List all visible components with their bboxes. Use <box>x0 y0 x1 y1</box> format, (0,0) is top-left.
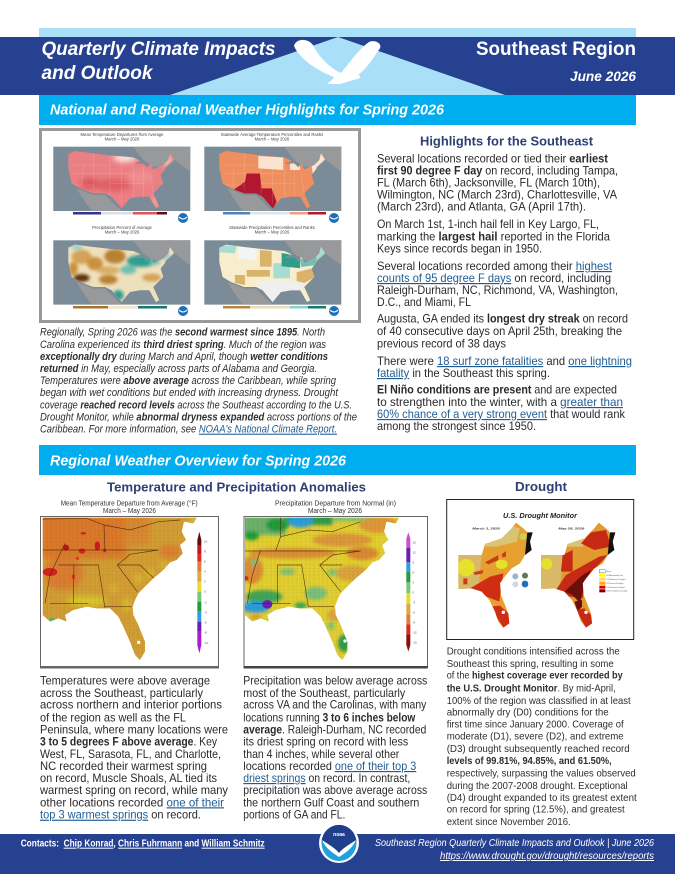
text block: regional summary: Drought Monitor, while abnormal dryness expanded across portions of the <box>40 411 357 423</box>
text block: regional summary: Carolina experienced its third driest spring. Much of the region was <box>40 339 327 351</box>
text block: highlights: There were 18 surf zone fatalities and one lightning <box>377 355 632 368</box>
map: precipitation anomaly shading <box>245 518 399 660</box>
text block: highlights: Several locations recorded among their highest <box>377 260 613 273</box>
text block: precipitation summary: driest springs on record. In contrast, <box>243 772 410 785</box>
panel: four national climate maps: March – May 2026 <box>255 230 290 234</box>
caption: March – May 2026 <box>103 508 156 515</box>
text: map title: Statewide Precipitation Percentiles and Ranks <box>229 225 315 230</box>
legend: precipitation scale: 12 <box>412 550 416 554</box>
text block: drought summary: levels of 99.81%, 94.85%, and 61.50%, <box>447 756 612 767</box>
title: and Outlook <box>42 63 154 84</box>
text block: highlights <box>377 153 632 433</box>
text block: regional summary: exceptionally dry during March and April, though wetter conditions <box>40 351 328 363</box>
text block: drought summary: 100% of the region was classified in at least <box>447 696 631 707</box>
text block: temperature summary: of the region as well as the FL <box>40 711 187 724</box>
region name: Southeast Region <box>476 39 636 60</box>
legend: temperature scale: 2 <box>204 579 206 583</box>
text block: drought summary: of the highest coverage ever recorded by <box>447 671 623 682</box>
title: Quarterly Climate Impacts <box>42 39 276 60</box>
text block: highlights: 60% chance of a very strong event that would rank <box>377 408 625 421</box>
text block: highlights: among the strongest since 1950. <box>377 420 536 433</box>
legend: precipitation scale <box>406 532 417 652</box>
icon: noaa logo: noaa <box>333 832 345 838</box>
legend: drought categories: D0 Abnormally Dry <box>606 574 623 577</box>
legend: precipitation scale: -6 <box>412 610 415 614</box>
map: march drought: March 3, 2026 <box>472 526 500 530</box>
text block: highlights: marking the largest hail reported in the Florida <box>377 230 611 243</box>
text block: precipitation summary: most of the Southeast, particularly <box>243 687 405 700</box>
section banner: national and regional highlights: National and Regional Weather Highlights for Spring 2026 <box>50 102 445 118</box>
chart: precipitation departure map <box>242 501 428 668</box>
text block: highlights: Several locations recorded or tied their earliest <box>377 153 608 166</box>
contacts: Contacts: Chip Konrad, Chris Fuhrmann and William Schmitz <box>21 839 265 850</box>
map: march drought <box>457 523 537 628</box>
legend: temperature bar <box>73 212 167 214</box>
text block: highlights: El Niño conditions are present and are expected <box>377 384 617 397</box>
text block: highlights: counts of 95 degree F days on record, including <box>377 272 611 285</box>
caption <box>61 500 198 515</box>
section banner: national and regional highlights <box>39 95 636 125</box>
text block: highlights: of 40 consecutive days on April 25th, breaking the <box>377 325 622 338</box>
text block: highlights: FL (March 6th), Jacksonville, FL (March 10th), <box>377 177 600 190</box>
text block: highlights: Wilmington, NC (March 23rd), Charlottesville, VA <box>377 189 617 202</box>
text block: drought summary: during the 2007-2008 drought. Exceptional <box>447 781 628 792</box>
heading: temperature and precipitation anomalies: Temperature and Precipitation Anomalies <box>107 480 366 494</box>
legend: temperature scale: -6 <box>204 620 207 624</box>
legend: precipitation scale: 0 <box>412 590 414 594</box>
icon: noaa seal <box>329 213 339 223</box>
text block: precipitation summary: locations running 3 to 6 inches below <box>243 711 416 724</box>
report date: June 2026 <box>570 68 636 84</box>
text block: temperature summary <box>39 675 228 822</box>
map: mean temperature departures <box>53 147 190 211</box>
text block: precipitation summary: locations recorded one of their top 3 <box>243 760 416 773</box>
legend: temperature scale: 8 <box>204 549 206 553</box>
text block: highlights: first 90 degree F day on record, including Tampa, <box>377 165 618 178</box>
section banner: regional weather overview: Regional Weather Overview for Spring 2026 <box>50 454 347 470</box>
text block: precipitation summary: portions of GA and FL. <box>243 809 345 822</box>
map: may drought <box>541 523 619 628</box>
legend: temperature scale: -2 <box>204 600 207 604</box>
text block: regional summary: returned in May, especially across parts of Alabama and Georgia. <box>40 363 317 375</box>
text block: precipitation summary: average. Raleigh-Durham, NC recorded <box>243 724 426 737</box>
text block: regional summary <box>40 327 357 436</box>
text block: temperature summary: Temperatures were above average <box>40 675 210 688</box>
caption: Mean Temperature Departure from Average (°F) <box>61 500 198 508</box>
map: precipitation percent of average <box>53 240 190 305</box>
icon: noaa seal <box>329 306 339 316</box>
text block: temperature summary: NC recorded their warmest spring <box>40 760 207 773</box>
legend: rank bar <box>223 306 326 308</box>
text block: temperature summary: Peninsula, where many locations were <box>40 724 228 737</box>
text block: drought summary: Drought conditions intensified across the <box>447 647 620 658</box>
legend: drought categories: D1 Moderate Drought <box>606 578 626 581</box>
map: statewide precipitation ranks <box>204 240 341 305</box>
text block: regional summary: Regionally, Spring 2026 was the second warmest since 1895. North <box>40 327 325 339</box>
text block: drought summary <box>447 647 637 828</box>
legend: precipitation scale: 9 <box>412 560 414 564</box>
text block: temperature summary: 3 to 5 degrees F above average. Key <box>40 736 217 749</box>
legend: drought categories: D2 Severe Drought <box>606 582 624 585</box>
panel: four national climate maps <box>40 130 360 322</box>
legend: precipitation scale: -12 <box>412 630 417 634</box>
legend: precipitation scale: -9 <box>412 620 415 624</box>
map title: U.S. Drought Monitor <box>503 513 578 520</box>
text: map title: Statewide Average Temperature Percentiles and Ranks <box>221 132 323 137</box>
legend: drought categories <box>599 570 628 593</box>
text block: drought summary: on record for spring (12.5%), and greatest <box>447 805 625 816</box>
text: map title: Precipitation Percent of Average <box>92 225 153 230</box>
map: statewide temperature ranks <box>204 147 341 211</box>
header triangle <box>170 37 505 95</box>
text block: temperature summary: top 3 warmest springs on record. <box>40 809 201 822</box>
text block: drought summary: respectively, surpassing the values observed <box>447 769 636 780</box>
text block: highlights: (March 23rd), and Atlanta, GA (April 17th). <box>377 201 586 214</box>
legend: drought categories: D4 Exceptional Drought <box>606 590 628 593</box>
text block: highlights: On March 1st, 1-inch hail fell in Key Largo, FL, <box>377 218 599 231</box>
icon: white bird <box>294 40 380 84</box>
panel: four national climate maps: March – May 2026 <box>255 136 290 142</box>
text block: highlights: to strengthen into the winter, with a greater than <box>377 396 623 409</box>
legend: precipitation scale: 6 <box>412 570 414 574</box>
caption: Precipitation Departure from Normal (in) <box>275 501 396 508</box>
text block: drought summary: the U.S. Drought Monitor. By mid-April, <box>447 683 616 694</box>
text block: highlights: previous record of 38 days <box>377 337 506 350</box>
text block: highlights: Keys since records began in 1950. <box>377 243 542 256</box>
chart: mean temperature departure map <box>40 500 219 668</box>
text block: regional summary: Caribbean. For more information, see NOAA's National Climate Report. <box>40 424 337 436</box>
map: temperature anomaly shading <box>42 518 196 660</box>
legend: rank bar <box>223 212 326 214</box>
legend: temperature scale: -10 <box>204 641 209 645</box>
title <box>42 39 276 84</box>
text block: highlights: Raleigh-Durham, NC, Richmond, VA, Washington, <box>377 284 618 297</box>
legend: temperature scale: -4 <box>204 610 207 614</box>
text block: precipitation summary: across VA and the Carolinas, with many <box>243 699 426 712</box>
map: may drought: May 26, 2026 <box>558 526 585 530</box>
legend: precipitation scale: 3 <box>412 580 414 584</box>
chart: us drought monitor maps <box>447 500 634 640</box>
text block: highlights: fatality in the Southeast this spring. <box>377 367 550 380</box>
text block: drought summary: (D3) drought subsequently reached record <box>447 744 630 755</box>
icons: partner logos <box>512 573 528 587</box>
legend: drought categories: None <box>606 571 612 573</box>
header banner <box>0 28 675 95</box>
legend: temperature scale: 0 <box>204 589 206 593</box>
caption: March – May 2026 <box>308 508 362 515</box>
icon: noaa seal <box>178 213 188 223</box>
caption <box>275 501 396 515</box>
text block: regional summary: Temperatures were above average across the Caribbean, while spring <box>40 375 336 387</box>
text block: drought summary: first time since January 2000. Coverage of <box>447 720 624 731</box>
text block: drought summary: abnormally dry (D0) conditions for the <box>447 708 609 719</box>
legend: temperature scale: 4 <box>204 569 206 573</box>
legend: precipitation scale: -15 <box>412 640 417 644</box>
text block: temperature summary: other locations recorded one of their <box>40 796 224 809</box>
heading: Highlights for the Southeast <box>420 134 594 149</box>
legend: temperature scale <box>197 532 209 653</box>
text block: drought summary: moderate (D1), severe (D2), and extreme <box>447 732 624 743</box>
panel: four national climate maps: March – May 2026 <box>105 136 140 142</box>
panel: four national climate maps: March – May 2026 <box>105 230 140 234</box>
text block: precipitation summary: the northern Gulf Coast and southern <box>243 796 419 809</box>
legend: temperature scale: 6 <box>204 559 206 563</box>
panel: highlights for the southeast <box>377 134 632 433</box>
legend: drought categories: D3 Extreme Drought <box>606 586 625 589</box>
text block: temperature summary: across the Southeast, particularly <box>40 687 203 700</box>
report url: https://www.drought.gov/drought/resources/reports <box>440 851 654 862</box>
text block: drought summary: (D4) drought expanded to its greatest extent <box>447 793 637 804</box>
text block: drought summary: extent since November 2016. <box>447 817 571 828</box>
icon: noaa seal <box>178 306 188 316</box>
section banner: regional weather overview <box>39 445 636 475</box>
text: map title: Mean Temperature Departures from Average <box>81 132 164 137</box>
footer <box>0 823 675 874</box>
text block: temperature summary: across northern and interior portions <box>40 699 222 712</box>
legend: temperature scale: 10 <box>204 539 208 543</box>
text block: temperature summary: warmest spring on record, while many <box>39 784 228 797</box>
legend: precipitation scale: 15 <box>412 540 416 544</box>
text block: precipitation summary: than 4 inches, while several other <box>243 748 399 761</box>
icon: noaa logo <box>319 823 359 863</box>
text block: highlights: Augusta, GA ended its longest dry streak on record <box>377 313 628 326</box>
text block: drought summary: Southeast this spring, resulting in some <box>447 659 614 670</box>
text block: precipitation summary: precipitation was above average across <box>243 784 427 797</box>
text block: temperature summary: on record, Muscle Shoals, AL tied its <box>40 772 217 785</box>
legend: temperature scale: -8 <box>204 630 207 634</box>
legend: precipitation bar <box>73 306 167 308</box>
text block: precipitation summary: Precipitation was below average across <box>243 675 427 688</box>
text block: regional summary: began with wet conditions but ended with increasing dryness. Drought <box>40 387 339 399</box>
heading: drought: Drought <box>515 479 568 494</box>
text block: precipitation summary: its driest spring on record with less <box>243 736 408 749</box>
text block: regional summary: coverage reached record levels across the Southeast according to the U.S. <box>40 399 352 411</box>
text block: precipitation summary <box>243 675 427 822</box>
text block: highlights: D.C., and Miami, FL <box>377 296 471 309</box>
legend: precipitation scale: -3 <box>412 600 415 604</box>
text block: temperature summary: West, FL, Sarasota, FL, and Charlotte, <box>40 748 221 761</box>
